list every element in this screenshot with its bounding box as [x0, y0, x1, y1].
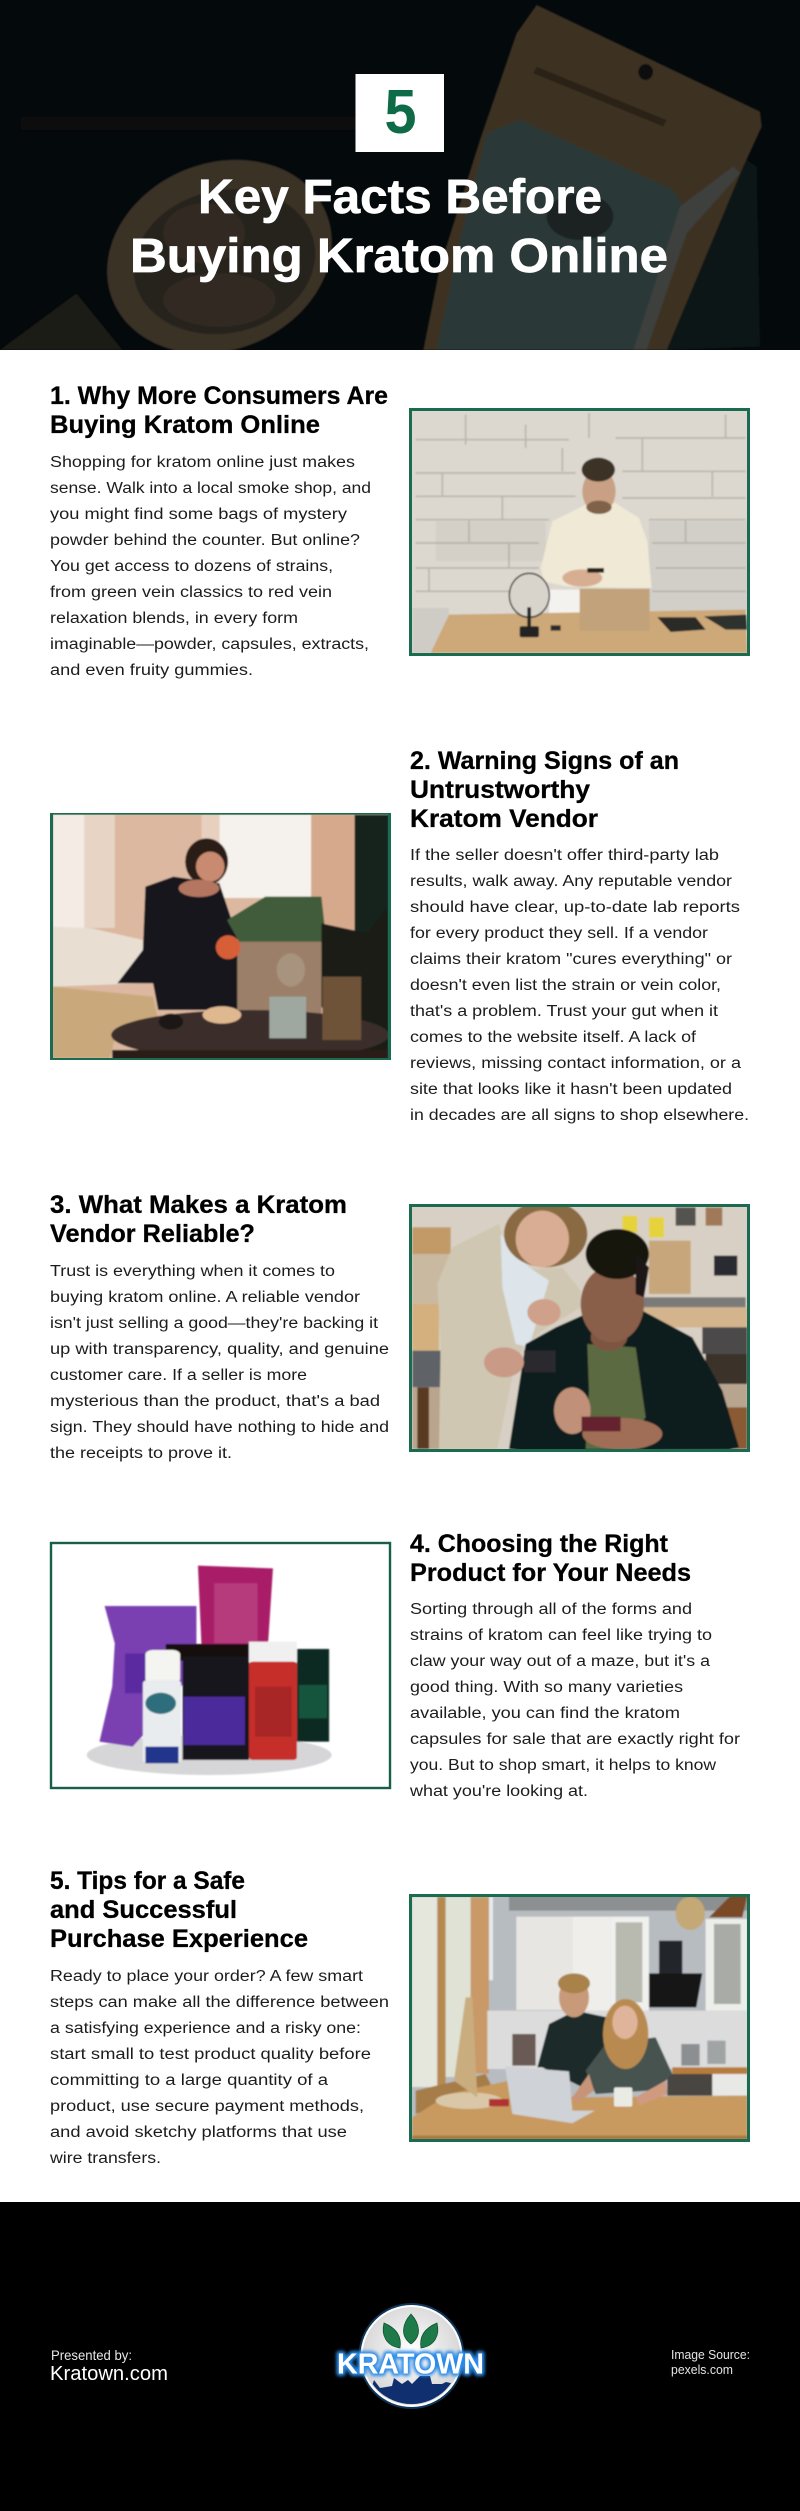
logo leaves — [383, 2314, 438, 2348]
header photo: wooden spoon — [2, 116, 356, 350]
body text 3: up with transparency, quality, and genuine — [50, 1341, 389, 1358]
panel: section 4 — [51, 1530, 740, 1800]
heading 4: Product for Your Needs — [410, 1559, 691, 1587]
body text 2: that's a problem. Trust your gut when it — [410, 1003, 719, 1020]
title — [130, 171, 668, 283]
body text 1: you might find some bags of mystery — [50, 506, 347, 523]
header banner — [0, 0, 800, 369]
body text 2: comes to the website itself. A lack of — [410, 1029, 697, 1046]
body text 4: claw your way out of a maze, but it's a — [410, 1653, 710, 1670]
body text 5: wire transfers. — [49, 2150, 161, 2167]
footer — [0, 2202, 800, 2511]
photo: couple with credit card and phone — [409, 1201, 750, 1452]
photo: kratom product lineup — [51, 1543, 390, 1788]
photo: couple at kitchen counter with laptop — [409, 1894, 751, 2142]
body text 2 — [410, 847, 749, 1124]
body text 4 — [409, 1601, 740, 1800]
body text 2: reviews, missing contact information, or a — [410, 1055, 741, 1072]
body text 4: good thing. With so many varieties — [410, 1679, 683, 1696]
heading 2: 2. Warning Signs of an — [410, 747, 679, 775]
body text 2: results, walk away. Any reputable vendor — [410, 873, 732, 890]
body text 5: Ready to place your order? A few smart — [50, 1968, 364, 1985]
logo: Kratown — [337, 2303, 484, 2409]
body text 1: from green vein classics to red vein — [50, 584, 332, 601]
body text 1: relaxation blends, in every form — [50, 610, 298, 627]
panel: section 1 — [50, 382, 750, 679]
heading 2 — [410, 747, 679, 833]
heading 3: Vendor Reliable? — [50, 1220, 255, 1248]
panel: section 3 — [50, 1191, 750, 1462]
body text 5: start small to test product quality before — [50, 2046, 371, 2063]
heading 1: 1. Why More Consumers Are — [50, 382, 388, 410]
body text 5 — [49, 1968, 389, 2167]
heading 1 — [50, 382, 388, 439]
body text 3: mysterious than the product, that's a bad — [50, 1393, 380, 1410]
heading 3 — [50, 1191, 347, 1248]
title: Key Facts Before — [198, 171, 602, 224]
body text 5: product, use secure payment methods, — [50, 2098, 364, 2115]
body text 1: You get access to dozens of strains, — [50, 558, 333, 575]
body text 1: powder behind the counter. But online? — [50, 532, 360, 549]
image source: Image Source: — [671, 2347, 750, 2362]
heading 5 — [50, 1867, 308, 1953]
logo: Kratown: KRATOWN — [337, 2348, 484, 2380]
body text 4: capsules for sale that are exactly right for — [410, 1731, 740, 1748]
heading 3: 3. What Makes a Kratom — [50, 1191, 347, 1219]
body text 1: Shopping for kratom online just makes — [50, 454, 355, 471]
heading 1: Buying Kratom Online — [50, 411, 320, 439]
body text 1: imaginable—powder, capsules, extracts, — [50, 636, 369, 653]
body text 2: If the seller doesn't offer third-party lab — [410, 847, 719, 864]
body text 1 — [50, 454, 371, 679]
body text 2: claims their kratom "cures everything" or — [410, 951, 732, 968]
body text 2: site that looks like it hasn't been updated — [410, 1081, 732, 1098]
heading 2: Kratom Vendor — [410, 805, 598, 833]
body text 4: what you're looking at. — [409, 1783, 588, 1800]
heading 5: and Successful — [50, 1896, 237, 1924]
number badge: 5 — [384, 78, 416, 147]
body text 5: steps can make all the difference between — [50, 1994, 389, 2011]
photo: man at laptop against brick wall — [409, 408, 750, 656]
photo: woman on sofa with laptop — [50, 813, 391, 1060]
body text 2: should have clear, up-to-date lab reports — [410, 899, 740, 916]
body text 3: the receipts to prove it. — [50, 1445, 232, 1462]
presented by — [50, 2347, 168, 2385]
body text 3: isn't just selling a good—they're backing it — [50, 1315, 379, 1332]
heading 5: Purchase Experience — [50, 1925, 308, 1953]
heading 4: 4. Choosing the Right — [410, 1530, 669, 1558]
title: Buying Kratom Online — [130, 230, 668, 283]
presented by: Kratown.com — [50, 2363, 168, 2385]
body text 1: sense. Walk into a local smoke shop, and — [50, 480, 371, 497]
body text 2: doesn't even list the strain or vein color, — [410, 977, 721, 994]
body text 1: and even fruity gummies. — [50, 662, 253, 679]
panel: section 2 — [50, 747, 749, 1124]
image source — [671, 2347, 750, 2377]
panel: section 5 — [49, 1867, 751, 2167]
body text 5: and avoid sketchy platforms that use — [50, 2124, 347, 2141]
body text 5: committing to a large quantity of a — [50, 2072, 328, 2089]
body text 3: customer care. If a seller is more — [50, 1367, 307, 1384]
heading 4 — [410, 1530, 691, 1587]
body text 2: for every product they sell. If a vendor — [410, 925, 708, 942]
presented by: Presented by: — [51, 2347, 132, 2363]
body text 2: in decades are all signs to shop elsewhere. — [410, 1107, 749, 1124]
body text 3: buying kratom online. A reliable vendor — [50, 1289, 360, 1306]
logo: Kratown: KRATOWN — [337, 2348, 484, 2380]
heading 2: Untrustworthy — [410, 776, 590, 804]
image source: pexels.com — [671, 2362, 733, 2377]
body text 3 — [50, 1263, 389, 1462]
body text 4: you. But to shop smart, it helps to know — [410, 1757, 717, 1774]
body text 4: Sorting through all of the forms and — [410, 1601, 692, 1618]
body text 3: Trust is everything when it comes to — [50, 1263, 335, 1280]
heading 5: 5. Tips for a Safe — [50, 1867, 245, 1895]
body text 4: strains of kratom can feel like trying to — [410, 1627, 712, 1644]
body text 5: a satisfying experience and a risky one: — [50, 2020, 361, 2037]
number badge — [356, 74, 444, 152]
body text 3: sign. They should have nothing to hide and — [50, 1419, 389, 1436]
body text 4: available, you can find the kratom — [410, 1705, 680, 1722]
header photo: kratom bag — [423, 5, 762, 350]
